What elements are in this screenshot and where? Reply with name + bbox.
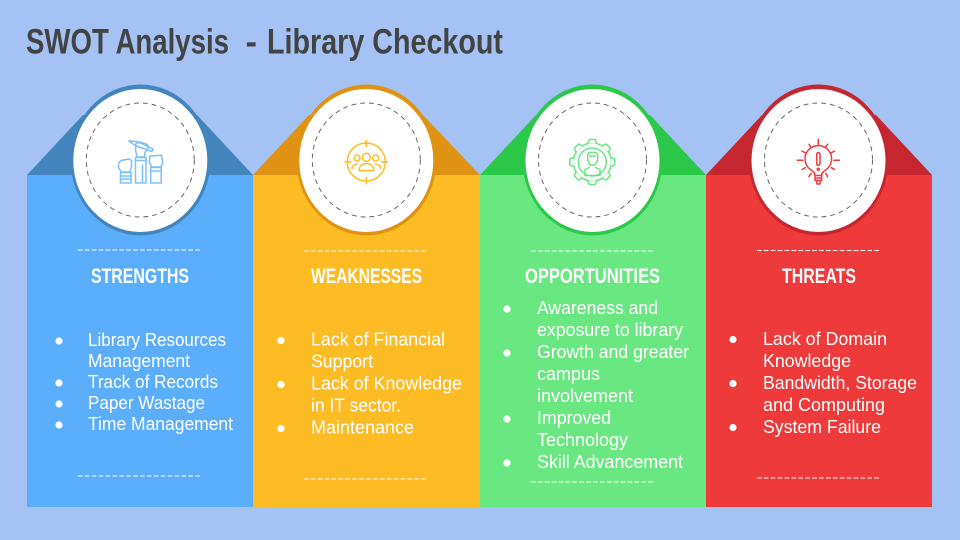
panel roof: threats: [706, 115, 932, 175]
dashes: strengths bottom: [78, 475, 202, 477]
dashes: opportunities top: [531, 250, 655, 252]
icon: person in gear: [570, 140, 615, 184]
list: weaknesses: Support: [311, 352, 373, 372]
title: Library Checkout: [267, 22, 503, 62]
title: -: [246, 22, 257, 62]
panel body: weaknesses: [253, 175, 480, 507]
list: strengths: Track of Records: [88, 372, 218, 392]
panel body: threats: [706, 175, 932, 507]
list: opportunities: Growth and greater: [537, 342, 689, 362]
list: opportunities: Technology: [537, 430, 628, 450]
dashes: threats bottom: [757, 477, 881, 479]
list: strengths: [55, 330, 233, 434]
dashes: weaknesses bottom: [304, 478, 428, 480]
list: opportunities: Improved: [537, 408, 611, 428]
list: threats: Knowledge: [763, 351, 851, 371]
panel: opportunities: [480, 84, 706, 507]
badge: opportunities: [522, 84, 662, 236]
list: strengths: Management: [88, 351, 190, 371]
list: opportunities: exposure to library: [537, 320, 683, 340]
list: weaknesses: in IT sector.: [311, 396, 401, 416]
list: threats: and Computing: [763, 395, 885, 415]
icon: people in target: [345, 140, 388, 184]
title: SWOT Analysis: [26, 22, 229, 62]
icon: warning light bulb: [797, 140, 839, 184]
list: opportunities: Awareness and: [537, 298, 658, 318]
list: opportunities: involvement: [537, 386, 633, 406]
badge: threats: [748, 84, 888, 236]
heading: threats: THREATS: [782, 265, 856, 288]
list: strengths: Time Management: [88, 414, 233, 434]
panel: strengths: [27, 84, 253, 507]
panel roof: opportunities: [480, 115, 706, 175]
badge: strengths: [70, 84, 210, 236]
list: threats: System Failure: [763, 417, 881, 437]
panel: threats: [706, 84, 932, 507]
panel roof: strengths: [27, 115, 253, 175]
panel: weaknesses: [253, 84, 480, 507]
list: opportunities: Skill Advancement: [537, 452, 683, 472]
list: threats: Bandwidth, Storage: [763, 373, 917, 393]
list: threats: [729, 329, 917, 437]
panel body: strengths: [27, 175, 253, 507]
list: strengths: Paper Wastage: [88, 393, 205, 413]
list: threats: Lack of Domain: [763, 329, 887, 349]
heading: opportunities: OPPORTUNITIES: [525, 265, 660, 288]
list: weaknesses: Maintenance: [311, 418, 414, 438]
dashes: opportunities bottom: [531, 481, 655, 483]
heading: strengths: STRENGTHS: [91, 265, 189, 288]
list: weaknesses: Lack of Knowledge: [311, 374, 462, 394]
list: opportunities: campus: [537, 364, 600, 384]
heading: weaknesses: WEAKNESSES: [311, 265, 422, 288]
title: [26, 22, 503, 62]
dashes: weaknesses top: [304, 250, 428, 252]
icon: raised fists with pencil: [118, 141, 163, 183]
list: weaknesses: Lack of Financial: [311, 330, 445, 350]
dashes: strengths top: [78, 249, 202, 251]
list: weaknesses: [277, 330, 462, 438]
list: opportunities: [503, 298, 689, 472]
badge: weaknesses: [296, 84, 436, 236]
list: strengths: Library Resources: [88, 330, 226, 350]
dashes: threats top: [757, 250, 881, 252]
panel body: opportunities: [480, 175, 706, 507]
panel roof: weaknesses: [253, 115, 480, 175]
